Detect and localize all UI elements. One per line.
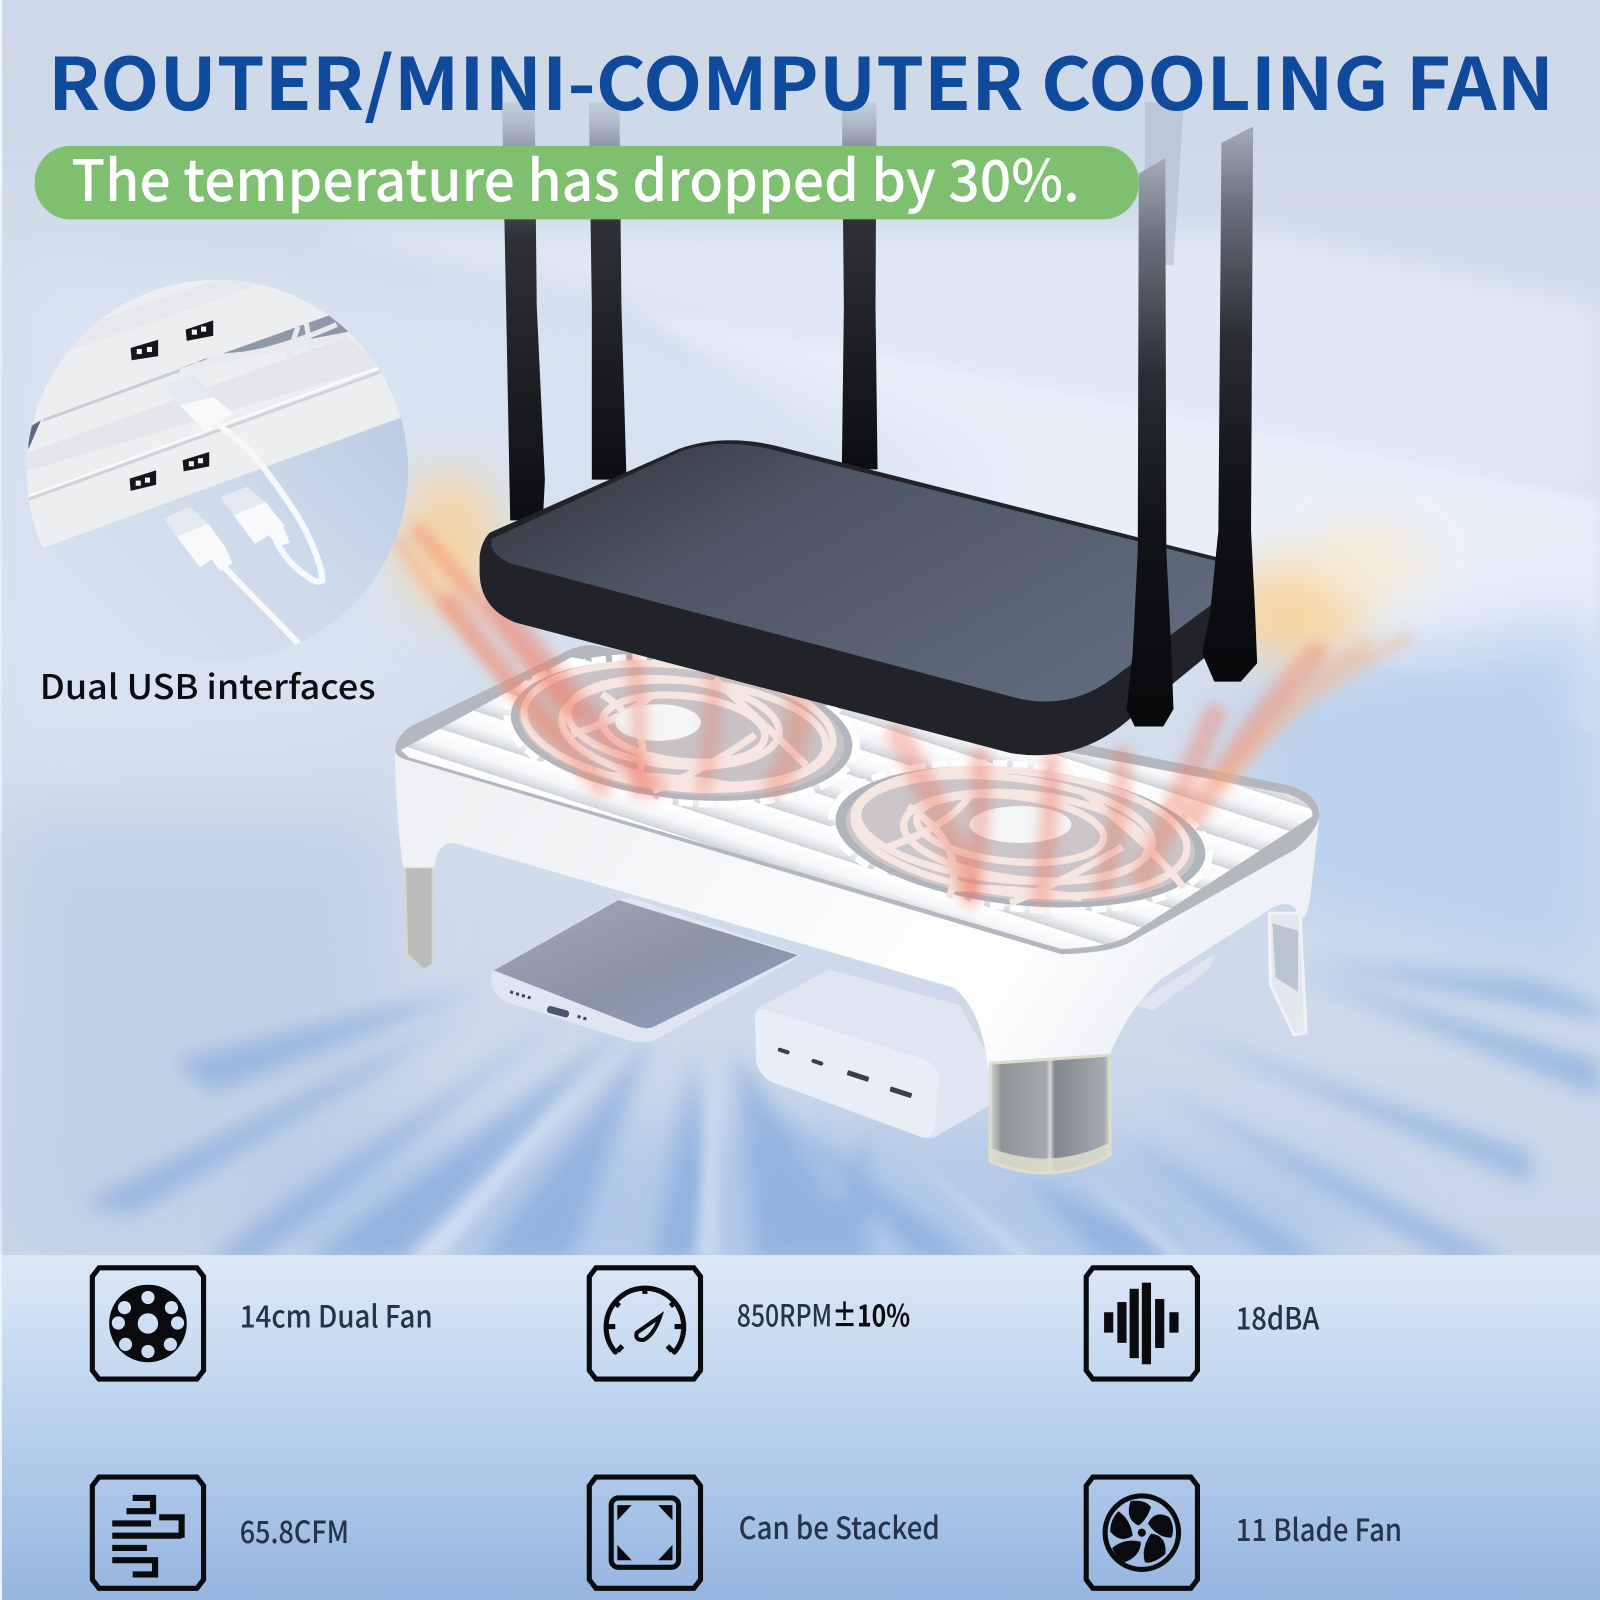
USB plug connected [180, 397, 234, 430]
icon: wind [92, 1477, 204, 1588]
spec: speed: 850RPM±10% [737, 1291, 910, 1336]
icon: stacked square [589, 1477, 701, 1588]
spec: fan size: 14cm Dual Fan [240, 1292, 433, 1337]
back legs [405, 867, 1306, 1035]
title: ROUTER/MINI-COMPUTER COOLING FAN [48, 26, 1554, 131]
fan two [828, 760, 1213, 914]
icon: blade fan [1086, 1477, 1197, 1588]
USB ports [130, 320, 213, 491]
power bank under the stand [755, 969, 992, 1138]
USB plug loose one [220, 487, 290, 547]
spec: blades: 11 Blade Fan [1236, 1505, 1402, 1550]
temperature callout pill: The temperature has dropped by 30%. [71, 136, 1080, 218]
icon: sound wave [1086, 1268, 1197, 1379]
phone under the stand [491, 898, 801, 1042]
USB label: Dual USB interfaces [40, 660, 376, 709]
rear antennas [502, 102, 1184, 520]
ribbed top surface [395, 645, 1319, 954]
front antennas [1127, 127, 1257, 727]
icon: fan disc [92, 1268, 204, 1379]
spec: noise: 18dBA [1236, 1294, 1320, 1339]
fan one [504, 654, 860, 808]
front translucent leg [990, 1055, 1110, 1173]
specification band [0, 1255, 1600, 1600]
cooling stand [395, 641, 1319, 1173]
device behind right leg [1135, 954, 1214, 1010]
USB plug loose two [163, 507, 233, 571]
white body [395, 649, 1319, 1066]
cool air glow and rays blowing out below the stand [82, 959, 1600, 1306]
router body [480, 440, 1254, 755]
spec: stacking: Can be Stacked [739, 1503, 940, 1548]
spec: airflow: 65.8CFM [240, 1507, 349, 1552]
USB cables [219, 426, 322, 642]
hot air streams [398, 531, 1408, 898]
icon: gauge [589, 1268, 701, 1379]
inset: USB detail circle [26, 280, 408, 644]
